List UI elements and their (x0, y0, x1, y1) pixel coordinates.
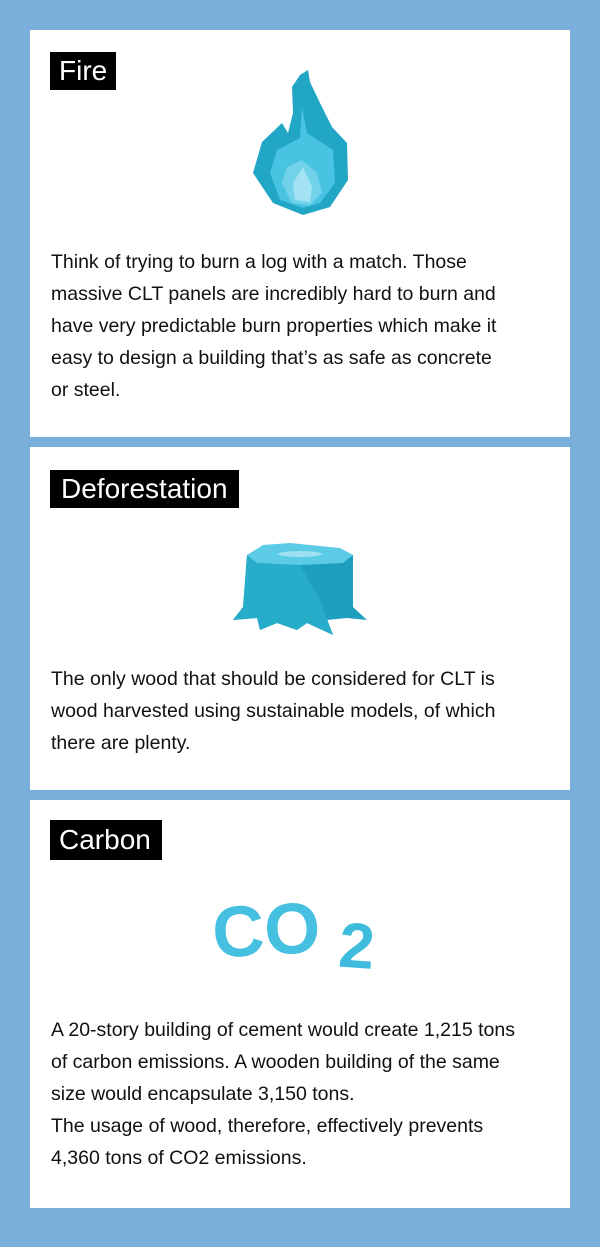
panel: fire (30, 30, 570, 437)
text: fire: have very predictable burn properties which make it (51, 315, 496, 337)
heading: Fire (50, 52, 116, 90)
text: fire (51, 251, 496, 401)
text: deforestation: there are plenty. (51, 732, 190, 754)
panel: carbon (30, 800, 570, 1208)
text: fire: or steel. (51, 379, 120, 401)
panel: deforestation (30, 447, 570, 790)
text: fire: massive CLT panels are incredibly hard to burn and (51, 283, 496, 305)
text: fire: Think of trying to burn a log with a match. Those (51, 251, 467, 273)
text: deforestation: The only wood that should be considered for CLT is (51, 668, 495, 690)
text: carbon: 4,360 tons of CO2 emissions. (51, 1147, 307, 1169)
text: deforestation: wood harvested using sustainable models, of which (51, 700, 495, 722)
heading: Deforestation: Deforestation (61, 473, 228, 504)
text: fire: easy to design a building that’s as safe as concrete (51, 347, 492, 369)
heading: Carbon: Carbon (59, 824, 151, 855)
text: carbon (51, 1019, 515, 1169)
text: deforestation (51, 668, 495, 754)
text: carbon: of carbon emissions. A wooden building of the same (51, 1051, 500, 1073)
icon: flame (253, 70, 348, 215)
text: carbon: size would encapsulate 3,150 tons. (51, 1083, 355, 1105)
icon: CO2: CO (210, 888, 322, 973)
icon: CO2: 2 (336, 909, 377, 983)
heading: Carbon (50, 820, 162, 860)
heading: Fire: Fire (59, 55, 107, 86)
text: carbon: A 20-story building of cement would create 1,215 tons (51, 1019, 515, 1041)
icon: CO2 (210, 888, 377, 983)
text: carbon: The usage of wood, therefore, effectively prevents (51, 1115, 483, 1137)
icon: tree stump (233, 543, 367, 635)
